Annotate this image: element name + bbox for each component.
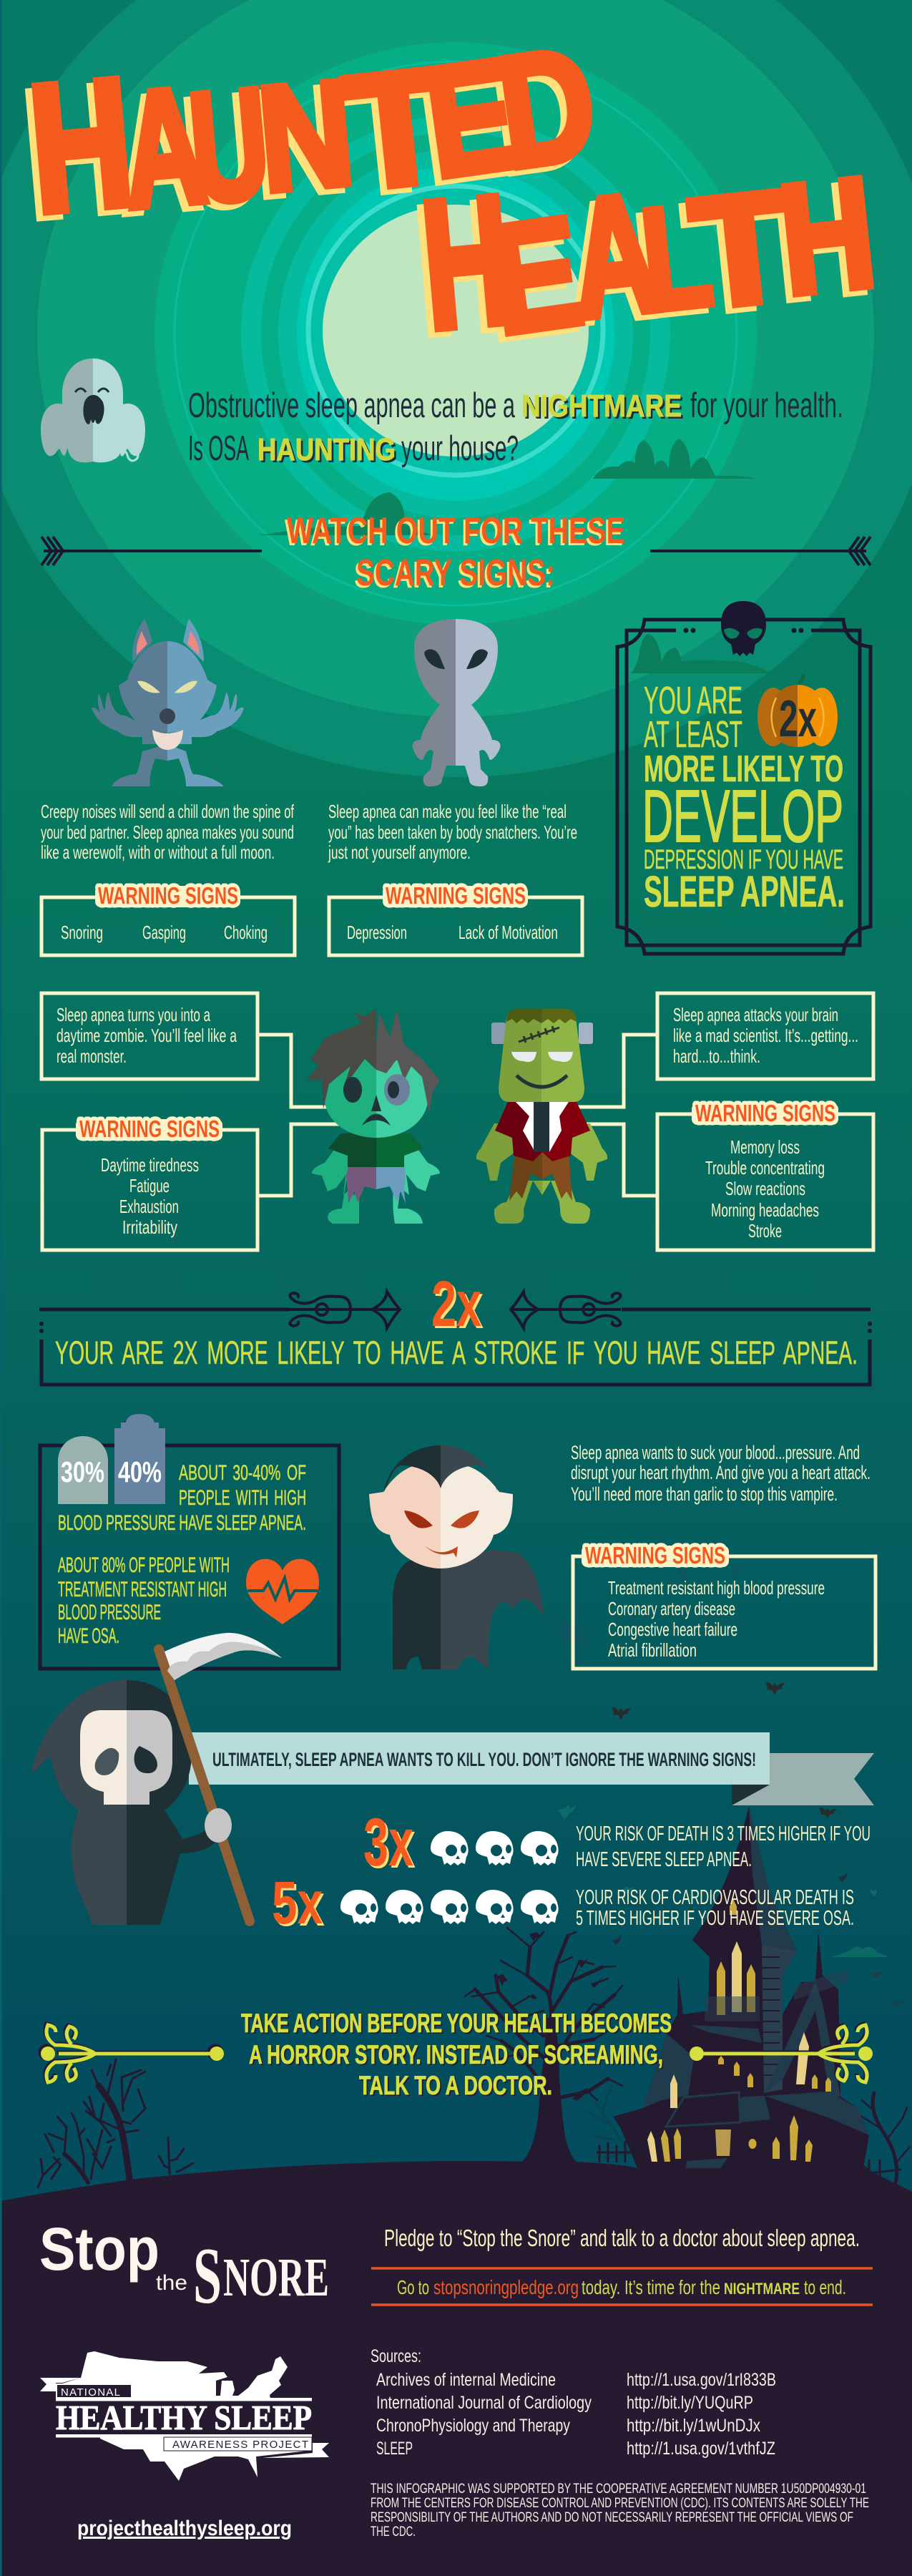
title: Haunted Health: E: [416, 25, 526, 210]
logo: Stop the Snore: [39, 2215, 329, 2321]
text: sources: http://bit.ly/1wUnDJx: [627, 2416, 760, 2436]
fence: [597, 2141, 901, 2182]
logo: national healthy sleep awareness project: [40, 2351, 329, 2481]
icon: heart: [246, 1559, 319, 1624]
text: alien description: [328, 801, 577, 863]
text: alien description: just not yourself anymore.: [328, 841, 471, 863]
panel: blood pressure statistics: TREATMENT RESISTANT HIGH: [58, 1578, 227, 1601]
icons: small bats: [612, 1682, 837, 1818]
text: sources: Archives of internal Medicine: [376, 2370, 556, 2390]
panel: stroke statistic: [39, 1269, 872, 1385]
call to action text: TAKE ACTION BEFORE YOUR HEALTH BECOMES: [242, 2010, 673, 2039]
logo: Stop the Snore: S: [193, 2232, 222, 2321]
clouds and bats: [558, 1805, 903, 2006]
text: alien description: you” has been taken by body snatchers. You’re: [328, 821, 577, 843]
panel: scientist description: [657, 993, 873, 1079]
number: 2x: 2x: [431, 1269, 481, 1340]
panel: zombie warning signs: Daytime tiredness: [101, 1154, 199, 1176]
panel: vampire warning signs: [573, 1542, 876, 1669]
title: Haunted Health: U: [177, 61, 269, 241]
intro text: HAUNTING: [260, 434, 398, 469]
panel: blood pressure statistics: [40, 1414, 339, 1669]
ornament: right scroll: [511, 1292, 621, 1328]
character: alien: [412, 619, 501, 786]
text: werewolf description: like a werewolf, with or without a full moon.: [41, 841, 275, 863]
panel: blood pressure statistics: BLOOD PRESSURE HAVE SLEEP APNEA.: [58, 1511, 306, 1535]
panel: vampire warning signs: Atrial fibrillation: [608, 1639, 697, 1661]
title: Haunted Health: H: [23, 40, 140, 250]
right tree: [855, 2093, 910, 2190]
panel: scientist warning signs: Memory loss: [730, 1136, 800, 1158]
logo: national healthy sleep awareness project: AWARENESS PROJECT: [172, 2439, 308, 2451]
title: Haunted Health: H: [16, 46, 134, 256]
icons: five skulls: [340, 1890, 559, 1924]
panel: warning signs werewolf: [41, 882, 295, 955]
text: website link: projecthealthysleep.org: [77, 2517, 292, 2540]
panel: scientist warning signs: [657, 1100, 873, 1250]
ornament: left flourish: [40, 2024, 224, 2082]
panel: scientist warning signs: Morning headaches: [711, 1199, 819, 1221]
text: sources: International Journal of Cardiology: [376, 2393, 592, 2413]
panel: blood pressure statistics: PEOPLE WITH HIGH: [179, 1486, 306, 1510]
title: Haunted Health: E: [410, 31, 520, 216]
title: Haunted Health: A: [563, 158, 667, 353]
panel: depression statistic: YOU ARE: [644, 679, 742, 722]
panel: depression statistic: AT LEAST: [644, 714, 742, 756]
panel: blood pressure statistics: ABOUT 80% OF PEOPLE WITH: [58, 1553, 230, 1577]
panel: zombie description: real monster.: [57, 1045, 127, 1067]
panel: zombie description: daytime zombie. You’ll feel like a: [57, 1025, 237, 1046]
panel: zombie description: Sleep apnea turns you into a: [57, 1004, 210, 1025]
panel: zombie description: [41, 993, 258, 1079]
far tree behind house: [587, 2086, 629, 2157]
panel: warning signs werewolf: Gasping: [142, 922, 186, 943]
title: Haunted Health: L: [628, 180, 712, 348]
number: 2x: 2x: [433, 1271, 484, 1342]
panel: warning signs werewolf: Snoring: [61, 922, 103, 943]
character: zombie: [306, 1009, 440, 1224]
intro text: NIGHTMARE: [521, 389, 682, 424]
title: Haunted Health: H: [415, 157, 519, 367]
panel: zombie warning signs: WARNING SIGNS: [79, 1116, 220, 1142]
text: sources: SLEEP: [376, 2439, 413, 2459]
panel: zombie warning signs: Fatigue: [129, 1175, 170, 1196]
text: werewolf description: [41, 801, 294, 863]
panel: warning signs werewolf: Choking: [224, 922, 268, 943]
intro text: NIGHTMARE: [524, 391, 684, 426]
text: sources: Sources:: [371, 2346, 421, 2366]
title: Haunted Health: H: [773, 145, 883, 328]
panel: blood pressure statistics: ABOUT 30-40% OF: [179, 1461, 306, 1485]
title: Haunted Health: N: [252, 49, 360, 223]
text: go to pledge: NIGHTMARE: [724, 2280, 800, 2298]
text: sources: ChronoPhysiology and Therapy: [376, 2416, 570, 2436]
logo: Stop the Snore: the: [156, 2271, 187, 2295]
text: go to pledge: Go to: [397, 2276, 429, 2298]
ornament: right flourish: [690, 2024, 873, 2082]
text: werewolf description: your bed partner. Sleep apnea makes you sound: [41, 821, 294, 843]
panel: depression statistic: [617, 601, 871, 954]
scythe: [159, 1633, 282, 1921]
call to action text: TALK TO A DOCTOR.: [359, 2071, 552, 2100]
text: go to pledge: stopsnoringpledge.org: [433, 2276, 579, 2298]
title: Haunted Health: H: [766, 150, 876, 333]
text: go to pledge: to end.: [804, 2276, 846, 2298]
panel: warning signs alien: WARNING SIGNS: [386, 882, 526, 909]
number: 5x: 5x: [272, 1869, 323, 1936]
panel: warning signs alien: Lack of Motivation: [459, 922, 558, 943]
title: Haunted Health: T: [677, 162, 793, 346]
panel: scientist warning signs: Trouble concentrating: [705, 1157, 825, 1179]
heading: watch out for these scary signs: [285, 510, 625, 596]
text: vampire description: [571, 1442, 871, 1505]
logo: Stop the Snore: NORE: [223, 2248, 329, 2308]
bushes: [259, 439, 756, 535]
panel: footer: [0, 2161, 912, 2576]
icon: skull: [721, 601, 766, 656]
panel: zombie warning signs: [42, 1116, 258, 1250]
character: vampire: [369, 1445, 544, 1669]
call to action text: A HORROR STORY. INSTEAD OF SCREAMING,: [249, 2040, 663, 2069]
text: alien description: Sleep apnea can make you feel like the “real: [328, 801, 567, 822]
house: [613, 1806, 869, 2190]
text: disclaimer: [371, 2482, 869, 2540]
title: Haunted Health: A: [556, 164, 660, 359]
main tree: [465, 1928, 622, 2162]
icons: bats around vampire panel: [558, 1562, 741, 1652]
panel: blood pressure statistics: HAVE OSA.: [58, 1624, 119, 1648]
call to action text: [241, 2009, 673, 2102]
logo: Stop the Snore: Stop: [39, 2215, 160, 2283]
title: Haunted Health: A: [116, 52, 212, 243]
title: Haunted Health: L: [634, 174, 719, 342]
panel: scientist warning signs: Slow reactions: [725, 1178, 805, 1199]
number: 3x: 3x: [366, 1807, 416, 1883]
title: Haunted Health: T: [684, 157, 800, 341]
text: disclaimer: THE CDC.: [371, 2524, 416, 2540]
title: Haunted Health: [16, 14, 883, 373]
text: sources: [371, 2346, 776, 2459]
panel: warning signs alien: Depression: [347, 922, 407, 943]
text: go to pledge: today. It’s time for the: [582, 2276, 720, 2298]
icon: tombstones: [58, 1414, 165, 1504]
title: Haunted Health: D: [489, 14, 606, 201]
scenery: haunted house and trees: [38, 1805, 910, 2190]
connectors: zombie and scientist boxes: [258, 1035, 657, 1196]
logo: national healthy sleep awareness project: NATIONAL: [61, 2386, 120, 2399]
intro text: your house?: [401, 429, 519, 468]
icon: ghost: [41, 358, 145, 462]
arrow: left: [41, 537, 262, 565]
title: Haunted Health: T: [331, 39, 449, 229]
panel: scientist description: hard...to...think.: [673, 1045, 760, 1067]
panel: vampire warning signs: WARNING SIGNS: [585, 1542, 725, 1568]
text: go to pledge: [397, 2276, 846, 2298]
call to action text: TAKE ACTION BEFORE YOUR HEALTH BECOMES: [241, 2009, 672, 2038]
text: werewolf description: Creepy noises will send a chill down the spine of: [41, 801, 294, 822]
heading: watch out for these scary signs: SCARY SIGNS:: [356, 552, 555, 594]
heading: watch out for these scary signs: SCARY SIGNS:: [354, 555, 553, 596]
icon: tombstones: 40%: [118, 1455, 162, 1488]
banner: warning ribbon: [189, 1732, 874, 1805]
character: werewolf: [92, 619, 244, 786]
intro text: HAUNTING: [258, 432, 396, 467]
text: sources: http://1.usa.gov/1rI833B: [627, 2370, 776, 2390]
title: Haunted Health: T: [338, 34, 456, 223]
title: Haunted Health: D: [483, 19, 599, 207]
icon: pumpkin: [757, 673, 838, 748]
panel: vampire warning signs: Coronary artery disease: [608, 1598, 735, 1619]
ornament: left scroll: [290, 1292, 400, 1328]
text: risk of death: [576, 1823, 871, 1871]
title: Haunted Health: E: [480, 183, 592, 366]
call to action text: A HORROR STORY. INSTEAD OF SCREAMING,: [250, 2041, 665, 2071]
panel: zombie warning signs: Irritability: [122, 1216, 177, 1238]
left trees: [38, 2059, 193, 2187]
title: Haunted Health: N: [246, 54, 353, 229]
panel: blood pressure statistics: BLOOD PRESSURE: [58, 1601, 161, 1624]
intro text: Is OSA: [188, 429, 249, 468]
character: grim reaper: [32, 1633, 282, 1925]
text: risk of death: HAVE SEVERE SLEEP APNEA.: [576, 1848, 752, 1871]
text: sources: http://bit.ly/YUQuRP: [627, 2393, 753, 2413]
panel: vampire warning signs: Congestive heart failure: [608, 1619, 737, 1640]
icon: pumpkin: 2x: [779, 691, 817, 748]
number: 3x: [363, 1805, 416, 1883]
heading: watch out for these scary signs: WATCH OUT FOR THESE: [285, 512, 623, 554]
character: frankenstein: [476, 1009, 607, 1224]
panel: warning signs alien: [329, 882, 582, 955]
number: 5x: 5x: [274, 1871, 325, 1938]
text: sources: http://1.usa.gov/1vthfJZ: [627, 2439, 775, 2459]
title: Haunted Health: U: [183, 55, 275, 235]
panel: zombie warning signs: Exhaustion: [119, 1196, 179, 1217]
title: Haunted Health: H: [408, 162, 512, 373]
intro text: [188, 386, 843, 469]
number: 3x: 3x: [363, 1805, 413, 1880]
icon: tombstones: 30%: [61, 1455, 104, 1488]
text: cardiovascular death: [576, 1886, 854, 1930]
panel: warning signs werewolf: WARNING SIGNS: [98, 882, 238, 909]
heading: watch out for these scary signs: WATCH OUT FOR THESE: [287, 510, 625, 552]
logo: national healthy sleep awareness project: HEALTHY SLEEP: [56, 2398, 312, 2437]
title: Haunted Health: A: [109, 58, 206, 248]
panel: scientist warning signs: Stroke: [748, 1220, 782, 1241]
arrow: right: [650, 537, 871, 565]
call to action text: TALK TO A DOCTOR.: [361, 2072, 554, 2102]
intro text: Obstructive sleep apnea can be a: [188, 386, 515, 425]
title: Haunted Health: E: [474, 189, 585, 372]
panel: scientist warning signs: WARNING SIGNS: [695, 1100, 835, 1126]
icons: three skulls: [431, 1831, 559, 1865]
